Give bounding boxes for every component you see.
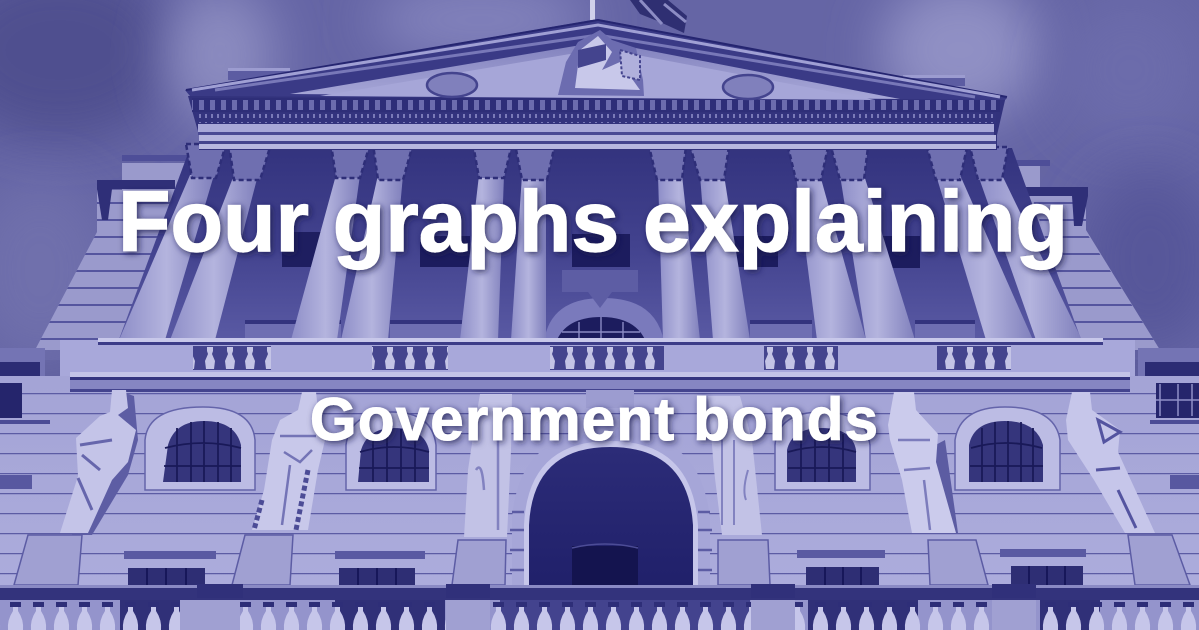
heading: Four graphs explaining: Four graphs explaining	[118, 174, 1068, 270]
arched windows	[145, 407, 1060, 490]
entablature	[188, 96, 1006, 150]
central arch doorway	[510, 390, 712, 590]
columns	[119, 175, 1082, 340]
statue plinths	[14, 535, 1190, 585]
bottom balustrade	[0, 584, 1199, 630]
balcony with balusters	[60, 338, 1135, 392]
statue 5	[888, 392, 958, 533]
statue 4	[708, 396, 762, 535]
side wings	[0, 348, 1199, 378]
subheading: Government bonds: Government bonds	[310, 386, 878, 453]
statue 2	[252, 392, 325, 530]
statue 3	[464, 394, 512, 537]
pediment with sculpture	[185, 19, 1007, 100]
column capitals	[186, 144, 1008, 180]
upper facade wall	[35, 155, 1160, 350]
colonnade back wall	[118, 148, 1082, 342]
ground floor windows	[128, 566, 1083, 588]
flag on pediment	[590, 0, 687, 33]
window lintels	[124, 549, 1086, 559]
statue 6	[1066, 392, 1155, 533]
statue 1	[60, 390, 138, 535]
statues	[60, 390, 1155, 537]
sky	[0, 0, 1199, 360]
lower facade	[0, 376, 1199, 591]
